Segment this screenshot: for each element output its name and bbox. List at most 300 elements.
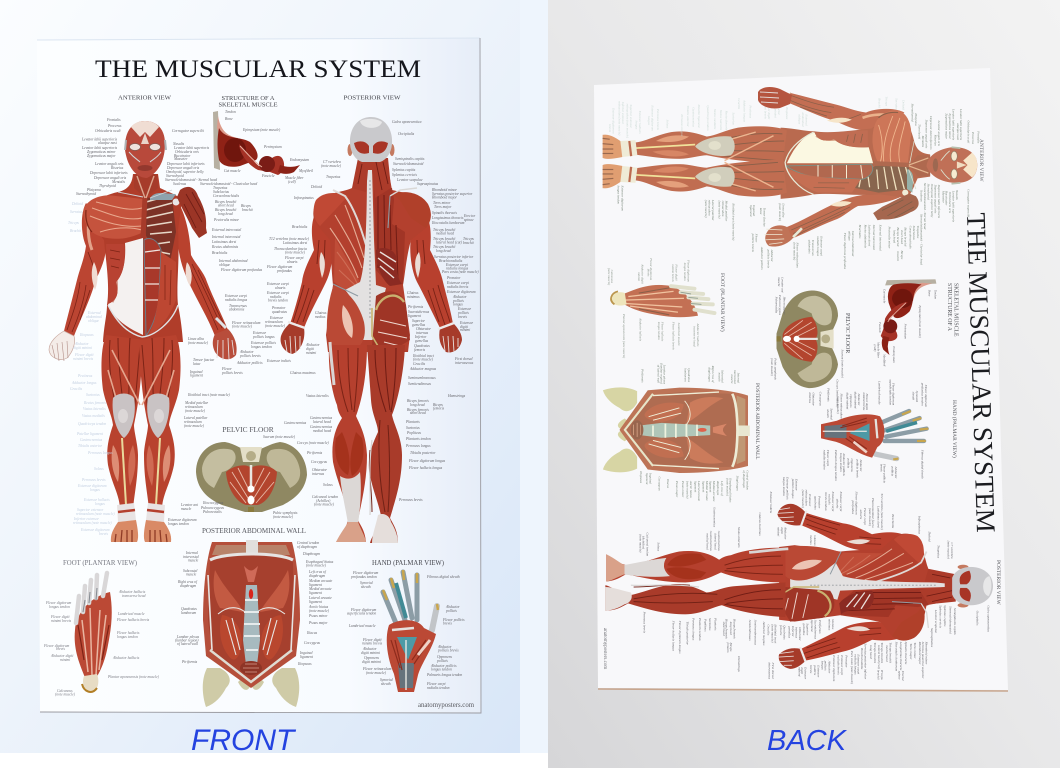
labels: posterior view: Superior [412, 319, 425, 323]
labels: posterior view: Gastrocnemius [310, 425, 333, 429]
labels: hand: Fibrous digital sheath [426, 575, 460, 579]
labels: abdominal wall: Diaphragm [302, 552, 320, 556]
figure: hand palmar view [347, 570, 465, 692]
back heading: anterior view: ANTERIOR VIEW [978, 139, 984, 182]
labels: hand: (note muscle) [366, 671, 387, 675]
left leg [101, 335, 146, 542]
labels: posterior view: spinae [464, 218, 474, 222]
labels: abdominal wall: intercostal [183, 555, 199, 559]
labels: posterior view: Extensor carpi [266, 282, 289, 286]
back heading: pelvic floor: PELVIC FLOOR [844, 313, 850, 353]
labels: hand: Abductor [445, 605, 460, 609]
labels: abdominal wall: Lumbar plexus [176, 635, 200, 639]
right hand [213, 329, 237, 359]
labels: anterior view: Medial patellar [184, 401, 209, 405]
labels: hand [347, 571, 465, 690]
labels: hand: Lumbrical muscle [348, 624, 376, 628]
labels: pelvic floor: Obturator [312, 468, 328, 472]
back heading: structure of a skeletal muscle: SKELETAL MUSCLE [952, 283, 958, 337]
faded labels: left of anterior figure: Gastrocnemius [80, 438, 103, 442]
labels: foot: Flexor digiti [50, 615, 70, 619]
faded labels: left of anterior figure: Peroneus longus [87, 451, 113, 455]
labels: anterior view: retinaculum [184, 420, 202, 424]
labels: anterior view: ligament [190, 374, 204, 378]
labels: posterior view: Galea aponeurotica [392, 120, 422, 124]
labels: anterior view: Lateral patellar [183, 416, 208, 420]
labels: posterior view: Biceps femoris [407, 408, 429, 412]
faded labels: left of anterior figure: retinaculum (note muscle) [76, 512, 115, 516]
labels: posterior view: Levator scapulae [396, 178, 423, 182]
faded labels: left of anterior figure: Brachii [70, 229, 81, 233]
labels: anterior view: Extensor carpi [224, 294, 247, 298]
shoulder flap muscle [177, 187, 207, 238]
rectum area [240, 661, 262, 675]
back heading: posterior view: POSTERIOR VIEW [995, 560, 1001, 606]
labels: anterior view: Extensor digitorum [167, 518, 197, 522]
labels: posterior view: Biceps femoris [407, 399, 429, 403]
heading: foot plantar view: FOOT (PLANTAR VIEW) [63, 560, 137, 567]
labels: abdominal wall: Quadratus [181, 607, 197, 611]
faded labels: left of anterior figure: oblique [88, 319, 99, 323]
labels: hand: Flexor digitorum [352, 571, 379, 575]
labels: posterior view: Extensor digitorum [446, 290, 476, 294]
labels: anterior view: Flexor digitorum profundus [220, 268, 263, 272]
labels: abdominal wall: Internal [185, 551, 198, 555]
labels: pelvic floor: internus [312, 472, 325, 476]
faded labels: left of anterior figure: Serratus [70, 210, 83, 214]
labels: pelvic floor: Piriformis [306, 451, 323, 455]
sacrum [240, 447, 262, 462]
labels: foot: longus tendon [49, 605, 70, 609]
labels: posterior view: digiti [460, 325, 468, 329]
back heading: structure of a skeletal muscle: STRUCTURE OF A [946, 283, 952, 331]
labels: posterior view: Hamstrings [447, 394, 466, 398]
labels: anterior view: Levator labii superioris [173, 146, 210, 150]
caption: back: BACK [767, 725, 848, 757]
main muscle belly [218, 128, 258, 167]
labels: skeletal muscle: (cell) [288, 180, 297, 184]
faded labels: left of anterior figure: longus [95, 502, 105, 506]
caption: front: FRONT [191, 724, 297, 757]
labels: posterior view: Inferior [414, 335, 427, 339]
head with galea [348, 144, 352, 156]
labels: abdominal wall: Iliacus [306, 631, 318, 635]
faded labels: left of anterior figure: Patellar ligament [76, 432, 104, 436]
labels: posterior view: Thoracolumbar fascia [274, 247, 307, 251]
gluteus left [327, 284, 365, 350]
labels: posterior view: Serratus posterior inferior [434, 255, 474, 259]
labels: posterior view: internus [416, 331, 429, 335]
labels: anterior view: abdominis [229, 308, 245, 312]
labels: posterior view: long head [410, 403, 425, 407]
labels: abdominal wall: Piriformis [181, 660, 198, 664]
labels: posterior view [250, 120, 479, 506]
labels: posterior view: Occipitalis [398, 132, 415, 136]
labels: foot: Lumbrical muscle [117, 612, 145, 616]
right arm [410, 214, 453, 328]
labels: foot: Abductor hallucis [118, 590, 146, 594]
labels: posterior view: Calcaneal tendon [312, 495, 338, 499]
labels: posterior view: Plantaris tendon [405, 437, 431, 441]
labels: hand: Abductor pollicis [430, 664, 457, 668]
head [125, 121, 165, 178]
labels: posterior view: pollicis [457, 311, 469, 315]
labels: posterior view: Trapezius [326, 175, 341, 179]
labels: posterior view: Flexor digitorum [266, 265, 293, 269]
faded labels: left of anterior figure: Gracilis [70, 387, 83, 391]
labels: posterior view: Tibialis posterior [410, 451, 436, 455]
labels: pelvic floor: (note muscle) [273, 515, 294, 519]
labels: pelvic floor: Sacrum (note muscle) [263, 435, 296, 439]
labels: posterior view: medial head [436, 232, 454, 236]
labels: posterior view: Abductor [452, 295, 467, 299]
labels: posterior view: interosseous [455, 361, 474, 365]
heading: structure of a skeletal muscle: SKELETAL MUSCLE [218, 102, 278, 109]
labels: abdominal wall: Left crus of [308, 570, 327, 574]
labels: abdominal wall: muscle [188, 558, 199, 562]
labels: anterior view: Buccinator [174, 154, 191, 158]
left leg [329, 345, 367, 542]
labels: hand: pollicis [445, 609, 457, 613]
labels: posterior view: ulnaris [287, 260, 298, 264]
labels: anterior view: Orbicularis oculi [95, 129, 121, 133]
back poster: pelvic floor figure [770, 276, 845, 407]
tendon and bone [213, 111, 220, 170]
labels: skeletal muscle: Myofibril [298, 169, 313, 173]
deep hip right [372, 291, 410, 352]
faded labels: left of anterior figure: Adductor longus [71, 381, 97, 385]
faded labels: left of anterior figure: Pectineus [77, 374, 93, 378]
torso [86, 174, 183, 342]
labels: anterior view: Frontalis [106, 118, 121, 122]
labels: posterior view: long head [436, 249, 451, 253]
labels: abdominal wall: Aortic hiatus [308, 605, 329, 609]
labels: posterior view: Spinalis thoracis [432, 211, 457, 215]
opened ribcage [144, 196, 176, 262]
toes [76, 573, 107, 623]
labels: hand: brevis [443, 622, 452, 626]
labels: hand: minimi brevis [362, 642, 383, 646]
labels: anterior view: oblique [219, 263, 230, 267]
labels: posterior view: Pronator [446, 276, 461, 280]
labels: posterior view: Iliocostalis lumborum [431, 221, 465, 225]
labels: posterior view: (note muscle) [321, 164, 342, 168]
labels: posterior view: First dorsal [454, 357, 473, 361]
labels: abdominal wall: muscle [186, 572, 197, 576]
labels: anterior view: Depressor labii inferioris [166, 162, 205, 166]
labels: posterior view: Semitendinosus [408, 382, 432, 386]
labels: foot: Flexor hallucis [116, 631, 140, 635]
labels: abdominal wall: of diaphragm [297, 545, 317, 549]
sole muscles [75, 592, 112, 680]
labels: anterior view: brachii [242, 208, 253, 212]
labels: hand: longus tendon [431, 668, 452, 672]
left hand [49, 331, 75, 360]
labels: skeletal muscle: Fascicle [261, 174, 275, 178]
labels: pelvic floor [180, 435, 330, 519]
labels: pelvic floor: Levator ani [180, 503, 198, 507]
faded labels: left of anterior figure: Peroneus brevis [81, 478, 106, 482]
labels: posterior view: Extensor [252, 331, 267, 335]
labels: abdominal wall: Inguinal [299, 651, 312, 655]
labels: posterior view: pollicis longus [252, 335, 275, 339]
labels: posterior view: Erector [463, 214, 476, 218]
labels: posterior view: (Achilles) [316, 499, 331, 503]
labels: hand: sheath [361, 585, 371, 589]
labels: posterior view: Teres major [434, 205, 452, 209]
labels: posterior view: brachii [463, 241, 474, 245]
labels: pelvic floor: Coccygeus [311, 460, 328, 464]
right arm [176, 198, 228, 336]
labels: pelvic floor: Pubic symphysis [272, 511, 298, 515]
labels: pelvic floor: Coccyx (note muscle) [297, 441, 330, 445]
labels: hand: radialis tendon [427, 686, 450, 690]
labels: posterior view: short head [410, 411, 426, 415]
labels: anterior view: Depressor anguli oris [166, 166, 200, 170]
labels: hand: Synovial [360, 581, 373, 585]
labels: anterior view: Pectoralis minor [213, 218, 239, 222]
labels: posterior view: Extensor carpi [445, 263, 468, 267]
labels: posterior view: Flexor hallucis longus [408, 466, 443, 470]
labels: anterior view: Levator anguli oris [94, 162, 124, 166]
labels: pelvic floor: Pubococcygeus [200, 506, 224, 510]
labels: posterior view: Iliotibial tract [412, 354, 435, 358]
labels: anterior view: Depressor labii inferioris [89, 171, 128, 175]
labels: anterior view: (note muscle) [232, 324, 253, 328]
background: back photo panel [548, 0, 1060, 768]
labels: anterior view: Rectus abdominis [211, 245, 239, 249]
neck and clavicle [134, 174, 158, 198]
labels: anterior view: Abductor [239, 350, 254, 354]
labels: abdominal wall: Median arcuate [308, 579, 333, 583]
labels: hand: Flexor digiti [362, 638, 382, 642]
labels: posterior view: brevis tendon [268, 298, 288, 302]
faded labels: left of anterior figure: Quadriceps tendon [78, 422, 106, 426]
labels: posterior view: Gluteus [315, 311, 327, 315]
labels: posterior view: Teres minor [433, 201, 451, 205]
labels: anterior view: Tensor fasciae [193, 358, 215, 362]
labels: anterior view: Corrugator supercilii [172, 129, 204, 133]
labels: foot: brevis [56, 647, 65, 651]
labels: anterior view: Sternocleidomastoid - Sternal head [165, 178, 217, 182]
figure: anterior view muscular body [49, 118, 263, 542]
labels: foot: (note muscle) [55, 692, 76, 696]
faded labels: left of anterior figure: Inferior extensor [73, 517, 99, 521]
labels: posterior view: retinaculum [265, 320, 283, 324]
labels: posterior view: Extensor pollicis [250, 341, 276, 345]
back title: THE MUSCULAR SYSTEM [961, 212, 1001, 533]
faded labels: left of anterior figure: Superior extensor [77, 508, 104, 512]
figure: posterior view muscular body [250, 117, 479, 543]
labels: abdominal wall: Subcostal [183, 569, 197, 573]
labels: abdominal wall: (note muscle) [309, 609, 330, 613]
labels: posterior view: Sternocleidomastoid [393, 162, 423, 166]
labels: posterior view: radialis brevis [447, 285, 469, 289]
labels: posterior view: radialis longus [446, 266, 469, 270]
website credit: anatomyposters.com [418, 701, 474, 709]
background: front photo panel [0, 0, 520, 753]
labels: posterior view: Infraspinatus [293, 196, 314, 200]
panel: back poster [594, 68, 1008, 691]
right hand [439, 323, 462, 352]
labels: abdominal wall: ligament [309, 600, 323, 604]
labels: anterior view: Levator labii superioris [81, 138, 118, 142]
labels: foot: minimi [60, 658, 70, 662]
labels: posterior view: Sacrotuberous [408, 310, 430, 314]
labels: anterior view [68, 118, 263, 536]
back poster: skeletal muscle figure [873, 279, 938, 366]
thumb [420, 606, 437, 650]
faded labels: left of anterior figure [68, 202, 115, 536]
labels: posterior view: Extensor carpi [446, 281, 469, 285]
labels: hand: pollicis brevis [437, 648, 459, 652]
labels: anterior view: radialis longus [225, 298, 248, 302]
labels: posterior view: Flexor digitorum longus [408, 459, 446, 463]
labels: anterior view: Thyrohyoid [99, 184, 116, 188]
labels: posterior view: Triceps brachii [433, 245, 455, 249]
left deltoid [314, 193, 348, 226]
labels: posterior view: Sartorius [406, 426, 420, 430]
labels: anterior view: Mentalis [111, 180, 125, 184]
right deltoid [392, 192, 431, 228]
left hand [281, 323, 304, 354]
labels: hand: Flexor retinaculum [362, 667, 392, 671]
fingers [383, 572, 417, 628]
labels: anterior view: Sternocleidomastoid - Clavicular head [200, 182, 257, 186]
back poster: cover for pale hand [763, 78, 790, 93]
labels: hand: digiti minimi [362, 660, 381, 664]
labels: abdominal wall: ligament [309, 583, 323, 587]
labels: posterior view: Extensor carpi [266, 291, 289, 295]
faded labels: left of anterior figure: Extensor hallucis [83, 498, 110, 502]
faded labels: left of anterior figure: Iliopsoas [79, 333, 94, 337]
labels: anterior view: Subclavius [213, 190, 230, 194]
faded labels: left of anterior figure: Abductor [74, 342, 89, 346]
labels: skeletal muscle: Endomysium [289, 158, 309, 162]
labels: anterior view: Internal intercostal [211, 235, 240, 239]
labels: posterior view: Extensor [457, 307, 472, 311]
labels: posterior view: Extensor [459, 321, 474, 325]
heel [83, 674, 98, 693]
heading: posterior view: POSTERIOR VIEW [344, 94, 401, 102]
labels: anterior view: Transversus [229, 304, 247, 308]
labels: anterior view: Flexor [221, 367, 232, 371]
labels: anterior view: Sternothyroid [76, 192, 96, 196]
back poster: abdominal wall figure [603, 363, 750, 503]
labels: anterior view: Procerus [107, 124, 122, 128]
labels: anterior view: Internal abdominal [218, 259, 248, 263]
labels: posterior view: ulnaris [275, 286, 286, 290]
labels: hand: superficialis tendon [347, 612, 376, 616]
panel: front poster [37, 38, 481, 713]
labels: posterior view: Gluteus [407, 291, 419, 295]
labels: skeletal muscle: Epimysium (note muscle) [242, 128, 281, 132]
labels: skeletal muscle [224, 110, 313, 184]
back poster: anterior figure [603, 80, 980, 270]
abdominal wall outer ring [203, 542, 300, 688]
back heading: hand palmar view: HAND (PALMAR VIEW) [951, 400, 958, 458]
labels: skeletal muscle: Tendon [225, 110, 236, 114]
labels: posterior view: (note muscle) [413, 358, 434, 362]
labels: foot: longus tendon [117, 635, 138, 639]
labels: anterior view: Linea alba [187, 337, 204, 341]
labels: abdominal wall: ligament [300, 655, 314, 659]
labels: posterior view: Splenius cervicis [392, 173, 417, 177]
labels: hand: Abductor [362, 647, 377, 651]
right back muscles, deep layer [374, 188, 405, 286]
heading: pelvic floor: PELVIC FLOOR [222, 425, 274, 434]
labels: posterior view: Soleus [323, 483, 333, 487]
labels: posterior view: Deltoid [310, 185, 322, 189]
labels: foot: transverse head [122, 594, 146, 598]
labels: posterior view: Triceps brachii [433, 237, 455, 241]
labels: abdominal wall: Iliopsoas [297, 662, 312, 666]
labels: posterior view: (note muscle) [285, 250, 306, 254]
labels: foot: Flexor digitorum [45, 601, 72, 605]
right leg [367, 345, 405, 543]
labels: posterior view: Peroneus longus [405, 444, 431, 448]
labels: hand: profundus tendon [350, 575, 377, 579]
faded labels: left of anterior figure: Deltoid [71, 202, 83, 206]
labels: abdominal wall: Coccygeus [304, 641, 321, 645]
labels: anterior view: longus tendon [168, 522, 189, 526]
labels: pelvic floor: Puborectalis [202, 510, 222, 514]
labels: anterior view: Omohyoid, superior belly [166, 170, 204, 175]
left arm [64, 203, 106, 336]
labels: anterior view: (note muscle) [185, 409, 206, 413]
labels: anterior view: Orbicularis oris [175, 150, 199, 154]
labels: foot: minimi brevis [51, 619, 72, 623]
labels: posterior view: Quadratus [414, 344, 430, 348]
labels: posterior view: Rhomboid major [431, 196, 457, 200]
labels: anterior view: Coracobrachialis [213, 194, 240, 198]
labels: anterior view: Scalenus [173, 182, 187, 186]
faded labels: left of anterior figure: minimi brevis [73, 357, 94, 361]
back heading: posterior abdominal wall: POSTERIOR ABDOMINAL WALL [754, 383, 760, 459]
labels: foot: Abductor digiti [50, 654, 73, 658]
labels: abdominal wall: Central tendon [297, 541, 319, 545]
faded labels: left of anterior figure: Extensor digitorum [77, 484, 107, 488]
labels: anterior view: Latissimus dorsi [211, 240, 236, 244]
palm [387, 620, 436, 692]
faded labels: left of anterior figure: Extensor digitorum [80, 528, 110, 532]
labels: anterior view: Zygomaticus minor [87, 150, 116, 154]
trapezius and latissimus strands [330, 205, 364, 286]
exposed rectus abdominis [144, 238, 161, 336]
labels: posterior view: Semispinalis capitis [395, 157, 425, 161]
labels: foot [43, 590, 160, 696]
labels: anterior view: pollicis brevis [239, 354, 261, 358]
labels: posterior view: minimus [407, 295, 420, 299]
labels: skeletal muscle: Bone [225, 117, 233, 121]
faded labels: left of anterior figure: Tibialis anterior [78, 444, 103, 448]
labels: posterior view: femoris [433, 406, 445, 410]
labels: posterior view: Pronator [271, 306, 286, 310]
heading: anterior view: ANTERIOR VIEW [118, 94, 171, 102]
faded labels: left of anterior figure: brevis [99, 532, 108, 536]
faded labels: left of anterior figure: abdominal [86, 315, 102, 319]
faded labels: left of anterior figure: Soleus [94, 467, 104, 471]
labels: pelvic floor: muscle [181, 507, 192, 511]
labels: anterior view: Trapezius [213, 186, 228, 190]
title: front poster: THE MUSCULAR SYSTEM [95, 56, 421, 83]
labels: anterior view: Sternohyoid [166, 174, 184, 178]
labels: anterior view: Iliotibial tract (note muscle) [187, 393, 230, 397]
labels: posterior view: Serratus posterior superior [432, 192, 473, 196]
pelvic floor muscles [226, 465, 277, 505]
labels: posterior view: Triceps brachii [433, 228, 455, 232]
labels: anterior view: short head [218, 204, 234, 208]
